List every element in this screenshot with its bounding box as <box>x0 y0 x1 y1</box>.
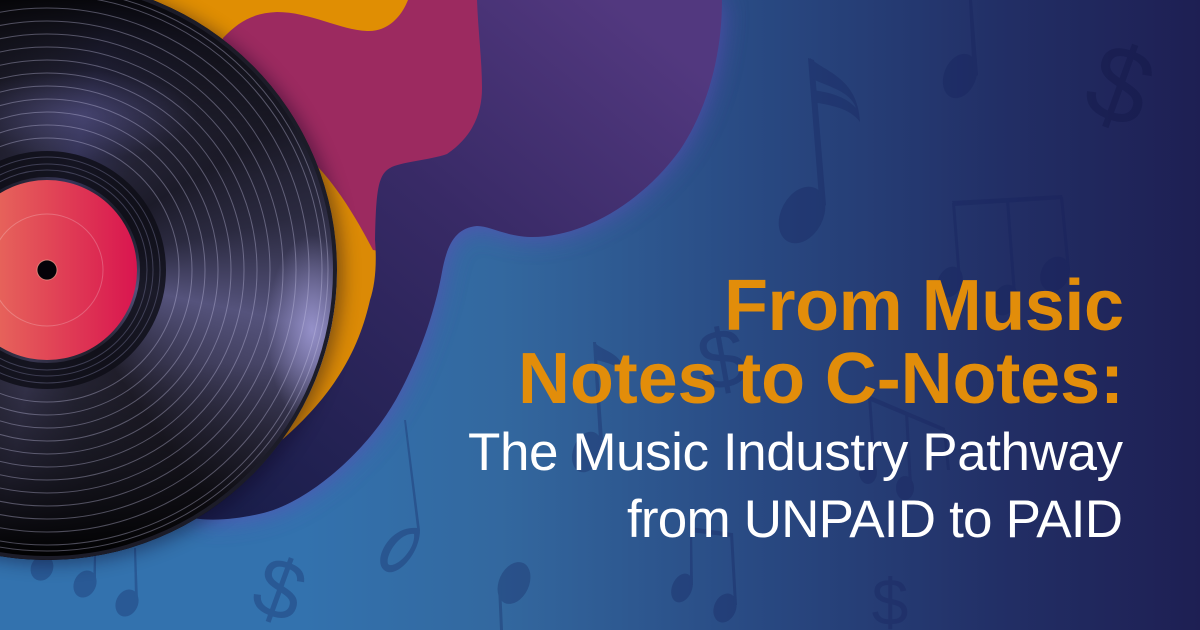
icon: beamed notes <box>932 195 1075 320</box>
icon: inverted note <box>491 557 537 630</box>
blob: orange top <box>140 0 420 60</box>
icon: dollar sign top right: $ <box>1071 17 1169 152</box>
label inner ring <box>0 214 103 326</box>
spindle hole <box>37 260 57 280</box>
dead wax lines <box>0 157 160 383</box>
vinyl grooves and label <box>0 0 337 560</box>
icon: note pair <box>667 527 741 626</box>
blob: orange lower <box>230 90 410 460</box>
icon: flag note behind title <box>567 342 624 477</box>
icon: double-flag note <box>769 58 860 251</box>
outer rim <box>0 0 335 558</box>
icon: note cluster bottom left <box>27 548 143 620</box>
subheading: from UNPAID to PAID <box>627 490 1123 549</box>
grooves <box>0 0 328 551</box>
subheading <box>468 423 1124 549</box>
dead wax ring <box>0 164 153 376</box>
red label <box>0 180 137 360</box>
heading <box>518 266 1124 419</box>
icon: hollow note <box>380 420 420 572</box>
heading: Notes to C-Notes: <box>518 339 1124 419</box>
blob: magenta <box>200 0 490 252</box>
heading: From Music <box>724 266 1124 346</box>
blob: purple to navy wave <box>193 0 722 520</box>
subheading: The Music Industry Pathway <box>468 423 1124 482</box>
icon: dollar sign behind title: $ <box>691 309 753 409</box>
vinyl sheen and edge shading <box>0 0 337 560</box>
vinyl record <box>0 0 337 560</box>
icon: beamed notes behind subtitle <box>859 395 950 500</box>
blob glow <box>193 0 722 520</box>
icon: top note <box>937 0 983 103</box>
